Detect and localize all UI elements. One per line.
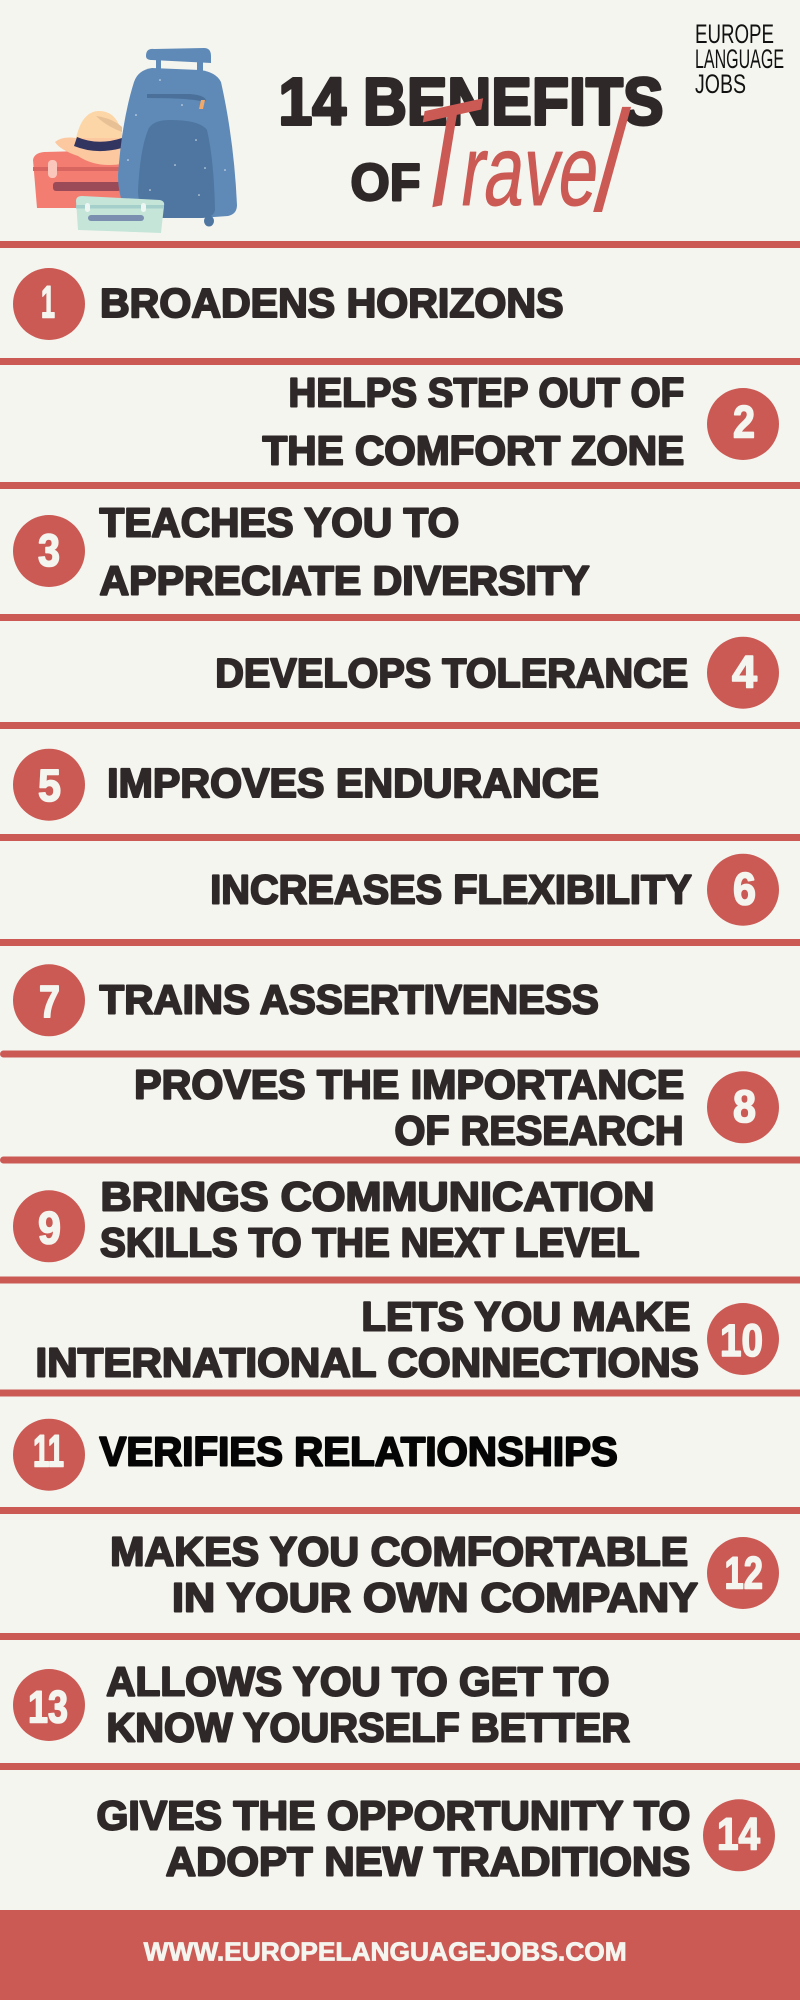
text: verifies relationships: VERIFIES RELATIONSHIPS [100,1429,618,1475]
text: allows you to get to know yourself better: ALLOWS YOU TO GET TO [106,1659,609,1705]
icon: green case [76,196,164,233]
text: teaches you to appreciate diversity: APPRECIATE DIVERSITY [100,558,590,604]
benefit 14 [96,1793,775,1885]
text: helps step out of the comfort zone: THE COMFORT ZONE [262,428,684,474]
text: develops tolerance: DEVELOPS TOLERANCE [215,650,688,696]
badge 5 [13,749,85,821]
text: allows you to get to know yourself better [106,1659,630,1751]
benefit 8 [134,1062,779,1154]
badge 13: 13 [28,1682,68,1732]
badge 7 [13,964,85,1036]
title: travel script: rave [455,115,607,227]
text: brings communication skills to the next level: BRINGS COMMUNICATION [100,1174,654,1220]
badge 12 [707,1537,779,1609]
text: improves endurance: IMPROVES ENDURANCE [107,760,599,806]
badge 10 [707,1303,779,1375]
text: proves the importance of research [134,1062,684,1154]
text: brings communication skills to the next level [100,1174,654,1266]
badge 1 [13,268,85,340]
text: makes you comfortable in your own company: IN YOUR OWN COMPANY [172,1574,698,1620]
badge 6 [707,854,779,926]
title: travel script: T [392,67,502,243]
logo: Europe Language Jobs [695,19,784,99]
header [33,19,784,243]
badge 7: 7 [39,976,60,1027]
badge 11 [13,1419,85,1491]
text: helps step out of the comfort zone [262,370,684,474]
text: makes you comfortable in your own company [110,1529,698,1620]
badge 4 [707,637,779,709]
text: allows you to get to know yourself better: KNOW YOURSELF BETTER [106,1705,630,1751]
badge 10: 10 [720,1315,763,1366]
badge 13 [13,1669,85,1741]
benefit 4 [215,637,779,709]
text: proves the importance of research: PROVES THE IMPORTANCE [134,1062,684,1108]
text: increases flexibility: INCREASES FLEXIBILITY [210,867,692,913]
benefit 9 [13,1174,654,1266]
badge 4: 4 [732,646,757,698]
badge 6: 6 [733,864,756,914]
badge 5: 5 [38,760,61,811]
benefit 11 [13,1419,618,1491]
icon: straw hat [55,111,123,165]
title: travel script: l [587,81,635,243]
text: makes you comfortable in your own company: MAKES YOU COMFORTABLE [110,1529,688,1575]
badge 2: 2 [733,396,755,448]
title: of: OF [350,154,420,212]
badge 8 [707,1071,779,1143]
footer url: WWW.EUROPELANGUAGEJOBS.COM [144,1936,627,1966]
benefit 6 [210,854,779,926]
text: lets you make international connections: INTERNATIONAL CONNECTIONS [36,1340,699,1386]
badge 8: 8 [733,1081,756,1132]
title: 14 benefits: 14 BENEFITS [278,64,664,140]
logo: Europe Language Jobs: JOBS [695,69,746,99]
text: trains assertiveness: TRAINS ASSERTIVENESS [100,977,599,1023]
benefit 7 [13,964,599,1036]
badge 3: 3 [38,525,60,576]
benefit 13 [13,1659,630,1751]
benefit 3 [13,500,590,604]
benefit 12 [110,1529,779,1620]
badge 9 [13,1190,85,1262]
text: lets you make international connections: LETS YOU MAKE [362,1294,690,1340]
icon: blue suitcase [118,48,237,226]
text: broadens horizons: BROADENS HORIZONS [100,280,564,326]
badge 1: 1 [41,276,55,328]
text: gives the opportunity to adopt new traditions [96,1793,690,1885]
text: helps step out of the comfort zone: HELPS STEP OUT OF [288,370,684,416]
text: teaches you to appreciate diversity [100,500,590,604]
text: brings communication skills to the next level: SKILLS TO THE NEXT LEVEL [100,1220,640,1266]
benefit 5 [13,749,599,821]
badge 14: 14 [717,1808,760,1860]
icon: red suitcase [33,150,122,208]
icon: luggage with hat [33,48,237,233]
text: lets you make international connections [36,1294,699,1386]
footer band [0,1910,800,2000]
text: gives the opportunity to adopt new traditions: GIVES THE OPPORTUNITY TO [96,1793,690,1839]
benefit 10 [36,1294,779,1386]
text: gives the opportunity to adopt new traditions: ADOPT NEW TRADITIONS [166,1839,690,1885]
text: proves the importance of research: OF RESEARCH [394,1108,684,1154]
badge 3 [13,515,85,587]
benefit 2 [262,370,779,474]
benefit 1 [13,268,564,340]
badge 2 [707,388,779,460]
badge 14 [703,1799,775,1871]
badge 12: 12 [724,1548,763,1598]
badge 11: 11 [33,1426,64,1476]
text: teaches you to appreciate diversity: TEACHES YOU TO [100,500,459,546]
badge 9: 9 [38,1202,61,1254]
